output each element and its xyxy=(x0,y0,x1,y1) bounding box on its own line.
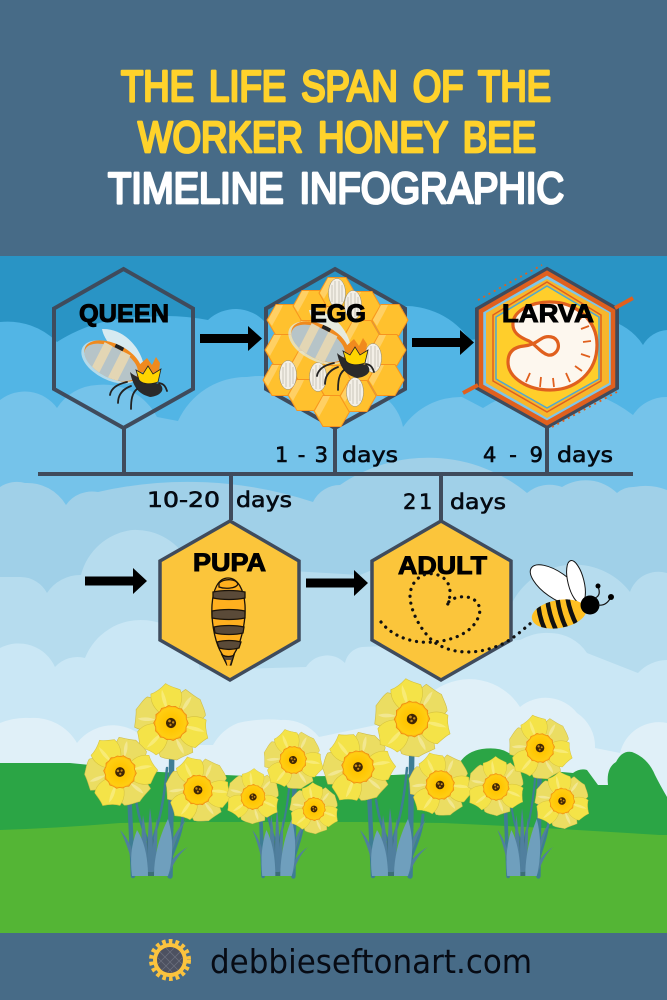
arrow: pupa to adult xyxy=(306,570,368,596)
duration: pupa: 10-20 xyxy=(147,488,220,512)
dark green hills xyxy=(0,748,667,933)
honeycomb xyxy=(263,278,408,426)
duration: larva: 4 - 9 xyxy=(483,443,543,467)
duration: pupa xyxy=(147,488,292,512)
icon: flying bee xyxy=(530,560,614,629)
label: pupa: PUPA xyxy=(193,549,266,577)
hexagon: larva xyxy=(463,265,633,427)
duration: larva: days xyxy=(557,443,613,467)
duration: adult: days xyxy=(450,490,506,514)
title: TIMELINE INFOGRAPHIC xyxy=(108,164,564,213)
light green meadow xyxy=(0,822,667,933)
label: egg: EGG xyxy=(310,300,366,328)
header band xyxy=(0,0,667,256)
label: larva: LARVA xyxy=(502,300,594,328)
sky background with clouds xyxy=(0,256,667,933)
duration: adult: 2 1 xyxy=(403,490,432,514)
hexagon: adult xyxy=(372,521,511,680)
icon: bee on comb xyxy=(281,310,374,390)
duration: pupa: days xyxy=(236,488,292,512)
eggs xyxy=(280,278,382,406)
website address: debbieseftonart.com xyxy=(210,942,532,981)
icon: queen bee xyxy=(74,329,167,409)
duration: egg: 1 - 3 xyxy=(275,443,328,467)
hexagon: queen xyxy=(54,269,193,428)
flight trail xyxy=(381,574,531,652)
title xyxy=(108,62,564,213)
duration: egg xyxy=(275,443,398,467)
arrow: queen to egg xyxy=(200,326,262,351)
duration: larva xyxy=(483,443,613,467)
daffodil flowers xyxy=(77,667,601,844)
leaf clump 1 xyxy=(120,735,188,876)
title: WORKER HONEY BEE xyxy=(138,113,536,162)
label: adult: ADULT xyxy=(398,552,487,580)
icon: larva xyxy=(508,302,597,390)
label: queen: QUEEN xyxy=(79,300,169,328)
hexagon: pupa xyxy=(160,521,299,680)
duration: egg: days xyxy=(342,443,398,467)
leaf clump 3 xyxy=(360,735,428,876)
hexagon: egg xyxy=(263,269,408,428)
title: THE LIFE SPAN OF THE xyxy=(121,62,551,111)
duration: adult xyxy=(403,490,506,514)
icon: pupa xyxy=(212,578,245,666)
decorative lines xyxy=(463,265,633,427)
leaf clump 2 xyxy=(252,735,308,876)
footer band xyxy=(0,933,667,1000)
leaf clump 4 xyxy=(497,735,553,876)
timeline connector lines xyxy=(38,428,633,520)
arrow: into pupa xyxy=(85,568,147,594)
icon: sunflower xyxy=(152,942,188,978)
arrow: egg to larva xyxy=(412,330,474,355)
